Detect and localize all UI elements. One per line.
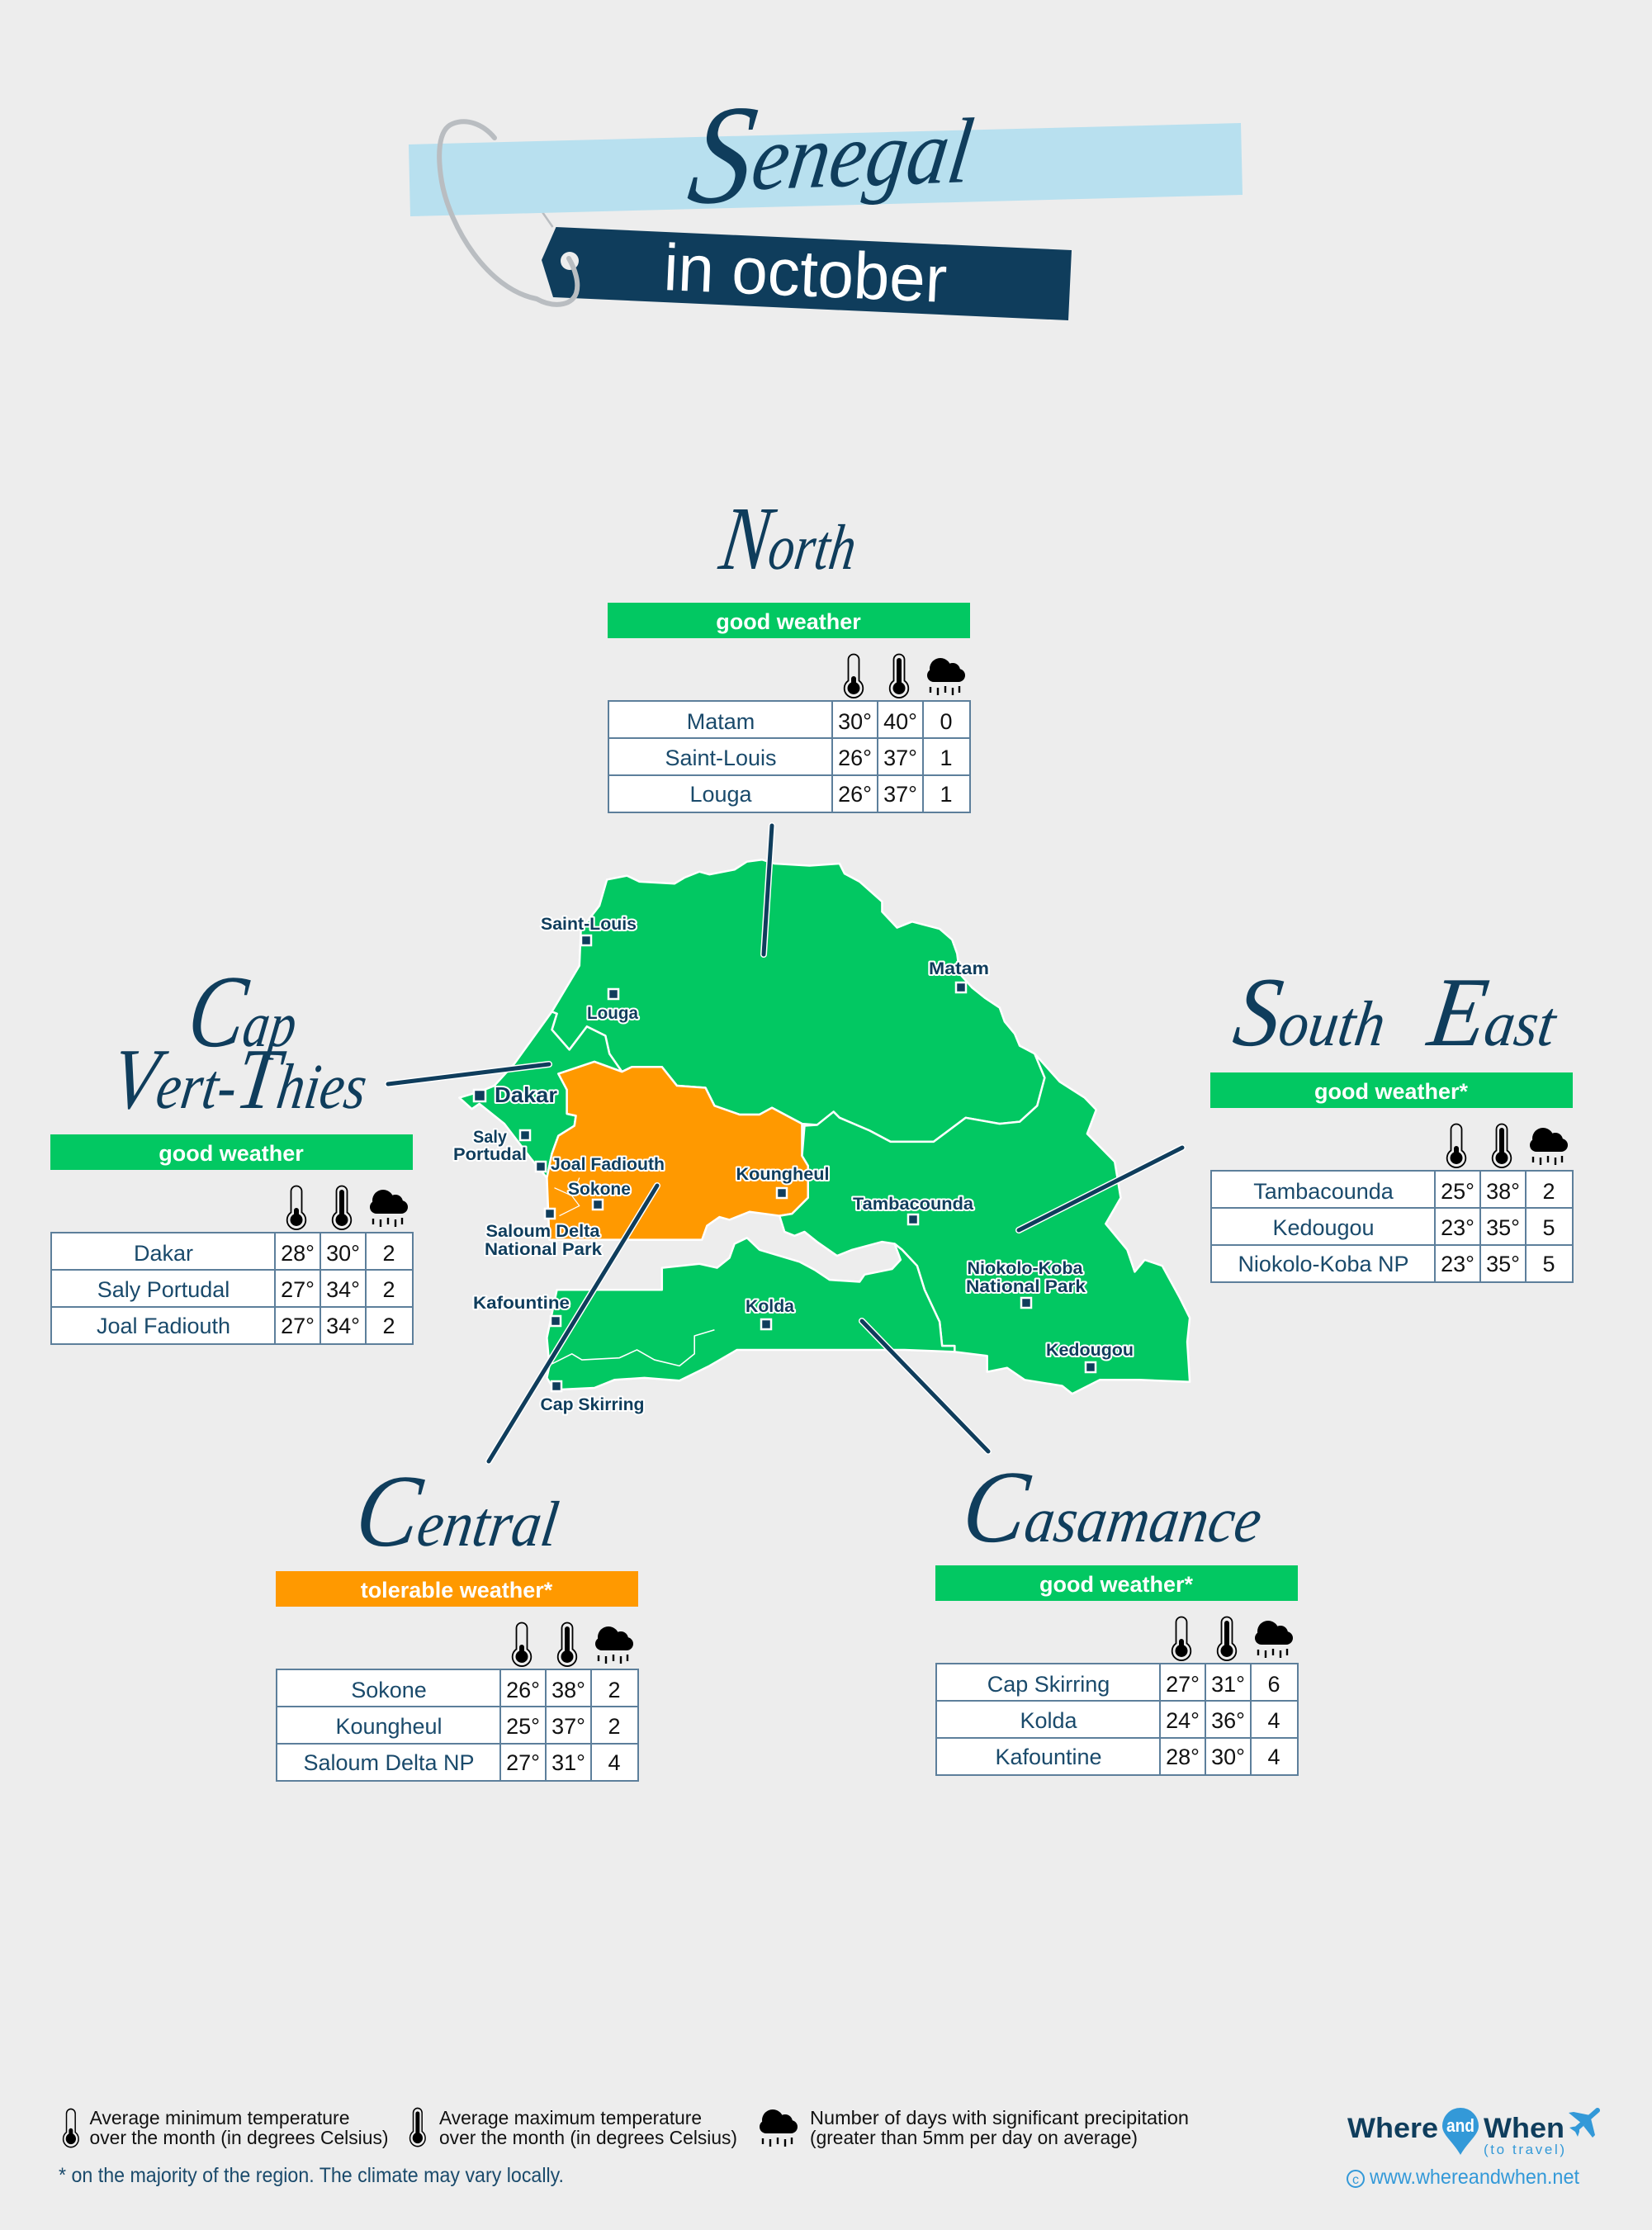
weather table: South East: 38° xyxy=(1486,1179,1520,1204)
leader line halo: Casamance xyxy=(862,1321,988,1451)
weather table: North: Matam xyxy=(687,709,755,734)
copyright symbol xyxy=(1347,2171,1364,2187)
weather table: Central: Koungheul xyxy=(335,1714,443,1739)
region: Central xyxy=(547,1062,808,1240)
weather table: South East: 23° xyxy=(1441,1252,1474,1276)
weather table: South East: 35° xyxy=(1486,1252,1520,1276)
city labels: Niokolo-Koba xyxy=(968,1259,1083,1278)
weather table: Central: 27° xyxy=(506,1750,540,1775)
weather table: South East: Niokolo-Koba NP xyxy=(1238,1252,1409,1276)
legend text: minimum temperature: over the month (in degrees Celsius) xyxy=(89,2127,388,2148)
leader: Cap Vert-Thies xyxy=(388,1064,549,1084)
weather table: Casamance: 24° xyxy=(1166,1708,1200,1733)
weather table: South East: Kedougou xyxy=(1272,1215,1375,1240)
weather table: North: 37° xyxy=(883,746,917,770)
city labels: Saint-Louis xyxy=(541,915,637,934)
weather table: Casamance: good weather* xyxy=(1039,1572,1193,1597)
legend text: precipitation: (greater than 5mm per day on average) xyxy=(810,2127,1138,2148)
leader: North xyxy=(764,826,772,954)
weather table: Central: 4 xyxy=(608,1750,621,1775)
weather table: Cap Vert-Thies: 30° xyxy=(326,1241,360,1266)
weather table: South East: 35° xyxy=(1486,1215,1520,1240)
heading: Cap: Cap xyxy=(182,955,306,1069)
weather table: Central: Sokone xyxy=(351,1678,427,1702)
weather table: Casamance: 28° xyxy=(1166,1745,1200,1769)
city markers xyxy=(474,935,1096,1391)
logo word: When: When xyxy=(1484,2113,1564,2144)
city labels: Sokone xyxy=(568,1180,631,1199)
region: North xyxy=(551,859,1044,1142)
city labels: Kolda xyxy=(746,1297,794,1316)
city labels: Kafountine xyxy=(473,1294,570,1313)
weather table: Casamance: 4 xyxy=(1267,1708,1280,1733)
legend text: minimum temperature: Average minimum temperature xyxy=(89,2107,350,2128)
region: Casamance xyxy=(547,1238,954,1390)
icon: minimum temperature xyxy=(64,2109,78,2147)
weather table: Cap Vert-Thies: 27° xyxy=(281,1314,315,1338)
panel: Central xyxy=(276,1455,638,1781)
city labels: National Park xyxy=(966,1277,1086,1296)
icon: maximum temperature xyxy=(410,2108,425,2147)
weather table: Casamance: Cap Skirring xyxy=(987,1672,1110,1697)
weather table: Central: 37° xyxy=(551,1714,585,1739)
weather table: Cap Vert-Thies: 28° xyxy=(281,1241,315,1266)
tag loop string xyxy=(439,121,577,305)
weather table: Central: 31° xyxy=(551,1750,585,1775)
legend text: precipitation: Number of days with significant precipitation xyxy=(810,2107,1189,2128)
map of Senegal xyxy=(388,826,1190,1461)
weather table: North: good weather xyxy=(716,609,861,634)
weather table: Central: 25° xyxy=(506,1714,540,1739)
heading: Vert-Thies: Vert-Thies xyxy=(107,1030,374,1127)
tag string behind band xyxy=(542,212,553,227)
weather table: South East xyxy=(1210,1072,1573,1282)
website: www.whereandwhen.net xyxy=(1369,2166,1579,2189)
legend text: maximum temperature: over the month (in degrees Celsius) xyxy=(439,2127,737,2148)
weather table: Cap Vert-Thies: Saly Portudal xyxy=(97,1277,230,1302)
city labels: Koungheul xyxy=(736,1165,829,1184)
light blue band xyxy=(409,123,1243,216)
panel: Cap Vert-Thies xyxy=(50,955,413,1344)
weather table: Central: 2 xyxy=(608,1678,621,1702)
copyright symbol: c xyxy=(1352,2173,1359,2187)
city labels: Tambacounda xyxy=(853,1195,973,1214)
legend xyxy=(59,2107,1189,2187)
heading: North: North xyxy=(714,487,864,589)
weather table: Cap Vert-Thies: 2 xyxy=(382,1241,395,1266)
weather table: Casamance: 6 xyxy=(1267,1672,1280,1697)
weather table: South East: Tambacounda xyxy=(1253,1179,1394,1204)
heading: East: East xyxy=(1421,959,1566,1068)
footnote: * on the majority of the region. The climate may vary locally. xyxy=(59,2164,564,2187)
weather table: South East: 23° xyxy=(1441,1215,1474,1240)
leader line halo: Central xyxy=(489,1186,657,1461)
region group xyxy=(459,859,1190,1394)
weather table: Central: Saloum Delta NP xyxy=(303,1750,475,1775)
weather table: Cap Vert-Thies xyxy=(50,1134,413,1344)
heading: Casamance: Casamance xyxy=(956,1451,1271,1565)
river: Saloum delta xyxy=(555,1178,580,1216)
city labels xyxy=(453,915,1134,1414)
weather table: Cap Vert-Thies: 27° xyxy=(281,1277,315,1302)
panel: North xyxy=(608,487,970,812)
title banner xyxy=(409,69,1243,320)
weather table: South East: 2 xyxy=(1542,1179,1555,1204)
weather table: North: 26° xyxy=(838,746,872,770)
weather table: Central: tolerable weather* xyxy=(361,1578,553,1603)
weather table: Casamance xyxy=(935,1565,1298,1775)
logo: Where and When xyxy=(1347,2108,1598,2189)
city labels: Saloum Delta xyxy=(485,1222,600,1241)
logo pin xyxy=(1442,2108,1479,2155)
region: South East xyxy=(779,1053,1190,1394)
city labels: Portudal xyxy=(453,1145,527,1164)
leader: South East xyxy=(1019,1148,1182,1230)
weather table: Casamance: Kolda xyxy=(1020,1708,1078,1733)
weather table: North: 1 xyxy=(940,782,953,807)
title: Senegal: S xyxy=(681,76,765,234)
weather table: Central xyxy=(276,1571,638,1781)
panel: Casamance xyxy=(935,1451,1298,1775)
icon: precipitation xyxy=(760,2109,798,2147)
tag hole xyxy=(561,252,579,270)
city labels: National Park xyxy=(485,1240,602,1259)
weather table: Cap Vert-Thies: Joal Fadiouth xyxy=(97,1314,230,1338)
icon: plane xyxy=(1569,2110,1598,2138)
weather table: North: 30° xyxy=(838,709,872,734)
leader: Casamance xyxy=(862,1321,988,1451)
weather table: Cap Vert-Thies: good weather xyxy=(159,1141,304,1166)
weather table: North: 37° xyxy=(883,782,917,807)
legend text: maximum temperature: Average maximum temperature xyxy=(439,2107,702,2128)
region: Cap Vert-Thies xyxy=(459,1011,622,1178)
river: Casamance xyxy=(551,1330,714,1366)
heading: Central: Central xyxy=(349,1455,568,1569)
panel: South East xyxy=(1210,959,1573,1282)
city labels: Matam xyxy=(929,959,989,978)
weather table: South East: good weather* xyxy=(1314,1079,1468,1104)
weather table: Central: 26° xyxy=(506,1678,540,1702)
weather table: North: 26° xyxy=(838,782,872,807)
weather table: Cap Vert-Thies: 34° xyxy=(326,1277,360,1302)
leader line halo: South East xyxy=(1019,1148,1182,1230)
subtitle: in october: in october xyxy=(662,230,949,316)
weather table: Casamance: 30° xyxy=(1211,1745,1245,1769)
weather table: North: 40° xyxy=(883,709,917,734)
heading: South: South xyxy=(1228,959,1394,1068)
weather table: Cap Vert-Thies: Dakar xyxy=(134,1241,193,1266)
weather table: South East: 25° xyxy=(1441,1179,1474,1204)
weather table: North xyxy=(608,603,970,812)
weather table: Casamance: 36° xyxy=(1211,1708,1245,1733)
logo word: and: and xyxy=(1446,2115,1474,2136)
weather table: North: 1 xyxy=(940,746,953,770)
leader line halo: Cap Vert-Thies xyxy=(388,1064,549,1084)
navy tag xyxy=(542,227,1072,320)
title: Senegal: enegal xyxy=(746,99,979,210)
weather table: Casamance: 31° xyxy=(1211,1672,1245,1697)
weather table: Casamance: 27° xyxy=(1166,1672,1200,1697)
weather table: North: Louga xyxy=(689,782,753,807)
city labels: Joal Fadiouth xyxy=(551,1155,665,1174)
weather table: Cap Vert-Thies: 34° xyxy=(326,1314,360,1338)
weather table: North: Saint-Louis xyxy=(665,746,777,770)
logo word: Where: Where xyxy=(1347,2113,1438,2144)
leader: Central xyxy=(489,1186,657,1461)
city labels: Saly xyxy=(473,1128,507,1147)
city labels: Kedougou xyxy=(1046,1341,1134,1360)
weather table: North: 0 xyxy=(940,709,953,734)
weather table: Cap Vert-Thies: 2 xyxy=(382,1277,395,1302)
city labels: Cap Skirring xyxy=(540,1395,644,1414)
city labels: Louga xyxy=(587,1004,638,1023)
leader line: North xyxy=(764,826,772,954)
weather table: South East: 5 xyxy=(1542,1215,1555,1240)
weather table: Cap Vert-Thies: 2 xyxy=(382,1314,395,1338)
weather table: Casamance: 4 xyxy=(1267,1745,1280,1769)
weather table: Central: 2 xyxy=(608,1714,621,1739)
weather table: Central: 38° xyxy=(551,1678,585,1702)
weather table: Casamance: Kafountine xyxy=(995,1745,1102,1769)
weather table: South East: 5 xyxy=(1542,1252,1555,1276)
logo tagline: (to travel) xyxy=(1484,2142,1564,2157)
city labels: Dakar xyxy=(495,1082,557,1107)
